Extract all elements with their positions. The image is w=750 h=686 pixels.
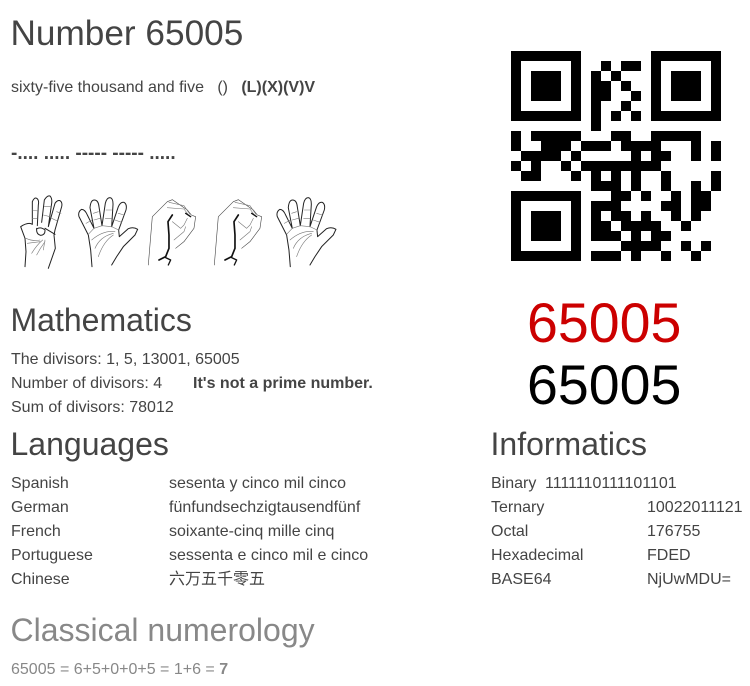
heading: Informatics: Informatics — [490, 426, 647, 462]
informatics table: Ternary — [491, 499, 544, 516]
languages table: sesenta y cinco mil cinco — [169, 475, 346, 492]
informatics table: 176755 — [647, 523, 700, 540]
languages table: Spanish — [11, 475, 69, 492]
prime note: It's not a prime number. — [193, 375, 373, 392]
number in words and roman numeral: sixty-five thousand and five () (L)(X)(V)V — [11, 79, 315, 96]
informatics table: Octal — [491, 523, 528, 540]
icon: hand sign 5 — [79, 198, 138, 267]
languages table: soixante-cinq mille cinq — [169, 523, 334, 540]
large red number: 65005 — [527, 292, 681, 354]
informatics table: 1111110111101101 — [545, 475, 677, 492]
languages table: Chinese — [11, 571, 70, 588]
languages table: French — [11, 523, 61, 540]
icon: hand sign 5 — [277, 198, 336, 267]
heading: Mathematics: Mathematics — [10, 302, 192, 338]
divisors: The divisors: 1, 5, 13001, 65005 — [11, 351, 240, 368]
languages table: fünfundsechzigtausendfünf — [169, 499, 360, 516]
languages table: sessenta e cinco mil e cinco — [169, 547, 368, 564]
languages table — [11, 475, 368, 588]
number of divisors: Number of divisors: 4 — [11, 375, 162, 392]
QR code — [511, 51, 721, 261]
informatics table: BASE64 — [491, 571, 551, 588]
informatics table: Hexadecimal — [491, 547, 583, 564]
informatics table: 10022011121 — [647, 499, 743, 516]
languages table: German — [11, 499, 69, 516]
icon: hand sign 0 — [214, 200, 262, 265]
informatics table: NjUwMDU= — [647, 571, 731, 588]
numerology sum: 65005 = 6+5+0+0+5 = 1+6 = 7 — [11, 661, 228, 678]
languages table: 六万五千零五 — [169, 571, 265, 588]
title: Number 65005 — [10, 14, 243, 53]
heading: Classical numerology: Classical numerology — [10, 612, 315, 648]
informatics table — [491, 475, 743, 588]
informatics table: FDED — [647, 547, 691, 564]
sum of divisors: Sum of divisors: 78012 — [11, 399, 174, 416]
icon: hand sign 6 — [21, 196, 62, 268]
heading: Languages: Languages — [10, 426, 169, 462]
icon: hand sign 0 — [148, 200, 196, 265]
languages table: Portuguese — [11, 547, 93, 564]
large black number: 65005 — [527, 354, 681, 416]
informatics table: Binary — [491, 475, 536, 492]
morse code: -.... ..... ----- ----- ..... — [11, 143, 176, 164]
